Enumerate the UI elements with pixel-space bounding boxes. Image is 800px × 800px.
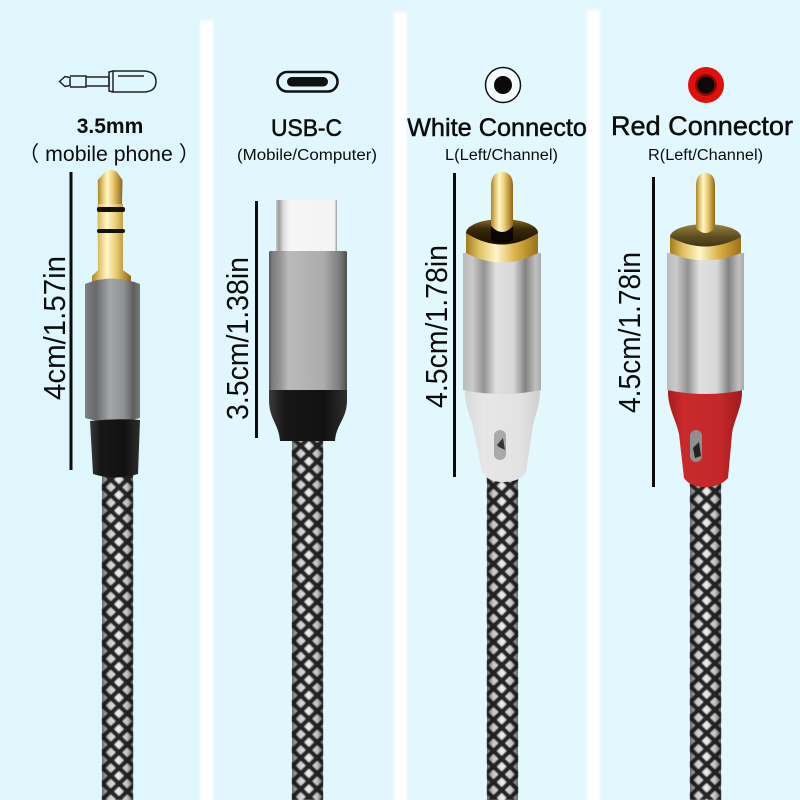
dimension label: white 4.5cm/1.78in: 4.5cm/1.78in [419, 245, 454, 408]
dimension label: 4cm/1.57in: 4cm/1.57in [37, 256, 72, 400]
panel: red connector [600, 0, 800, 800]
heading: White Connecto: White Connecto [407, 114, 587, 142]
icon: USB-C port [278, 72, 338, 92]
connector: red RCA plug [667, 173, 744, 487]
icon: red RCA socket [688, 67, 724, 103]
cable: braided USB-C [292, 436, 323, 800]
cable: braided 3.5mm [102, 470, 133, 800]
connector: white RCA plug [463, 172, 541, 482]
subheading: mobile phone: （ mobile phone ） [18, 143, 200, 166]
divider bars [200, 10, 600, 800]
connector: 3.5mm jack plug [85, 170, 140, 478]
dimension line: 3.5mm [70, 172, 72, 470]
dimension line: white [453, 173, 456, 477]
connector: USB-C plug [269, 200, 347, 441]
heading: Red Connector: Red Connector [611, 111, 793, 141]
dimension line: USB-C [255, 201, 258, 438]
icon: white RCA socket [486, 68, 520, 102]
heading: 3.5mm: 3.5mm [77, 115, 143, 138]
dimension label: red 4.5cm/1.78in: 4.5cm/1.78in [612, 252, 647, 413]
subheading: R(Left/Channel): R(Left/Channel) [648, 147, 763, 164]
subheading: Mobile/Computer: (Mobile/Computer) [237, 147, 377, 164]
cable: braided red [690, 480, 721, 800]
panel: white connector [407, 0, 587, 800]
icon: 3.5mm jack [60, 71, 156, 92]
subheading: L(Left/Channel): L(Left/Channel) [445, 147, 558, 164]
heading: USB-C: USB-C [271, 115, 342, 142]
panel: 3.5mm connector [0, 0, 200, 800]
panel: USB-C connector [213, 0, 394, 800]
cable: braided white [487, 476, 518, 800]
dimension label: 3.5cm/1.38in: 3.5cm/1.38in [220, 257, 255, 420]
dimension line: red [652, 177, 655, 487]
